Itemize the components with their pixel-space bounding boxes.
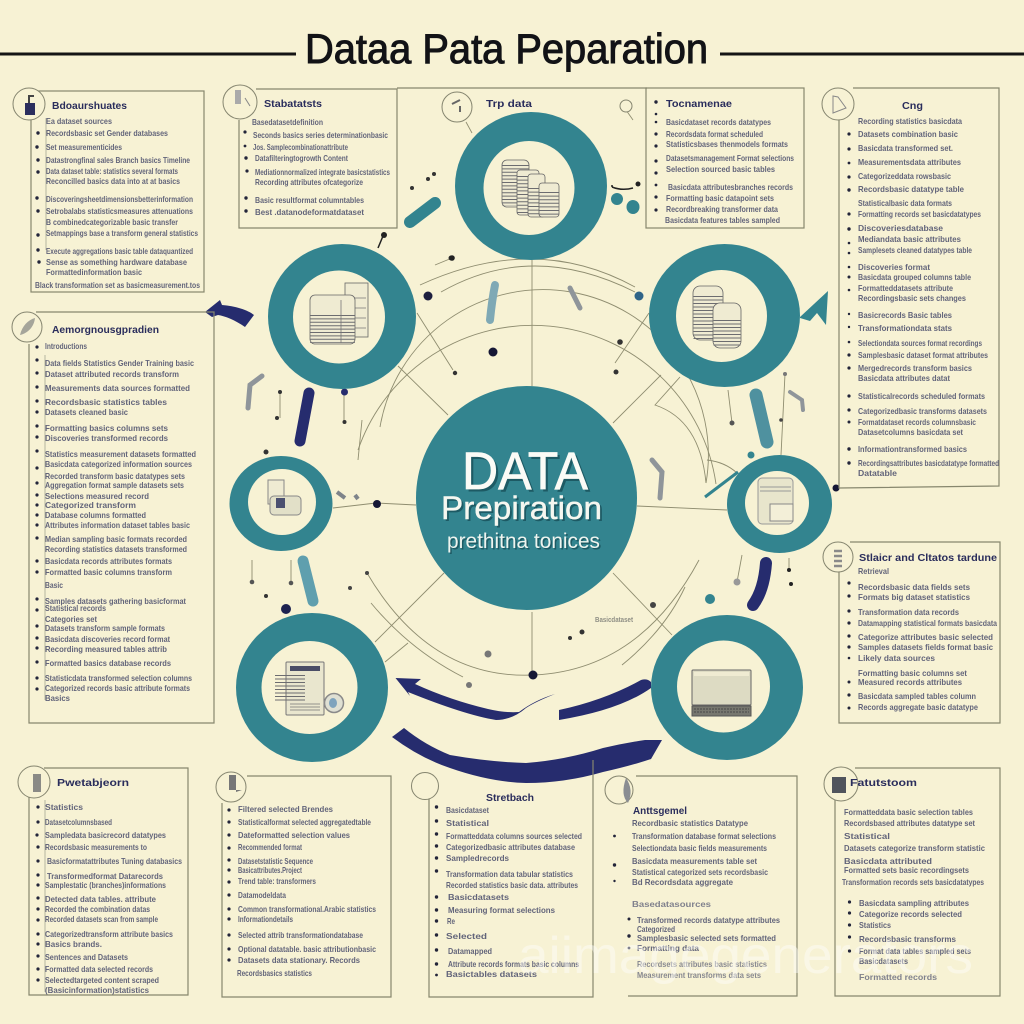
list: bottom third panel: Transformation data tabular statistics [446, 869, 573, 879]
list: left tall panel: Statistics measurement datasets formatted [45, 449, 196, 459]
list: left tall panel: Samples datasets gathering basicformat [45, 596, 186, 606]
arrows [205, 291, 828, 783]
list: bottom second panel: Selected attrib transformationdatabase [238, 930, 363, 940]
list: right tall panel: Basicdata attributes datat [858, 373, 950, 383]
list: bottom second panel: Dateformatted selection values [238, 830, 350, 840]
list: bottom fourth panel: Transformed records datatype attributes [637, 915, 780, 925]
list: left tall panel: Median sampling basic formats recorded [45, 534, 187, 544]
list: left tall panel: Datasets transform sample formats [45, 623, 165, 633]
node: lower left [236, 613, 388, 762]
list: right tall panel: Formatting records set basicdatatypes [858, 209, 981, 219]
list: left tall panel: Statistical records [45, 603, 106, 613]
list: second panel: Jos. Samplecombinationattribute [253, 142, 348, 152]
list: bottom third panel [435, 805, 582, 979]
list: left tall panel: Recording measured tables attrib [45, 644, 167, 654]
list: bottom third panel: Selected [446, 931, 487, 941]
list: right tall panel: Categorizeddata rowsbasic [858, 171, 951, 181]
icon: document [268, 480, 301, 515]
list: second panel: Best .datanodeformatdataset [255, 207, 364, 217]
icon: bottom fourth panel [605, 776, 633, 804]
center circle: prethitna tonices [448, 532, 602, 554]
title [0, 25, 1024, 72]
list: bottom fifth panel: Statistical [844, 831, 890, 841]
icon: top center circle left [442, 92, 472, 122]
list: bottom second panel: Common transformational.Arabic statistics [238, 904, 376, 914]
list: bottom fifth panel: Recordsbasic transforms [859, 934, 956, 944]
list: bottom second panel: Filtered selected Brendes [238, 804, 333, 814]
heading: bottom fourth panel: Anttsgemel [633, 805, 687, 817]
list: top left panel: Set measurementicides [46, 142, 122, 152]
heading: left tall panel: Aemorgnousgpradien [52, 324, 159, 336]
list: bottom fourth panel: Recordsets attributes basic statistics [637, 959, 767, 969]
list: bottom first panel: Datasetcolumnsbased [45, 817, 112, 827]
list: right tall panel: Samplesbasic dataset format attributes [858, 350, 988, 360]
list: top fourth panel [654, 100, 794, 225]
icon: bottom second panel [216, 772, 246, 802]
list: bottom second panel: Basicattributes.Project [238, 865, 302, 875]
list: right lower panel [847, 566, 997, 712]
panel: left tall [12, 312, 214, 723]
list: right lower panel: Recordsbasic data fields sets [858, 582, 970, 592]
list: bottom first panel: Sampledata basicrecord datatypes [45, 830, 166, 840]
list: bottom third panel: Basicdatasets [448, 892, 509, 902]
list: bottom second panel: Trend table: transformers [238, 876, 316, 886]
list: left tall panel: Categorized transform [45, 500, 136, 510]
list: right tall panel: Datasetcolumns basicdata set [858, 427, 963, 437]
list: left tall panel: Selections measured record [45, 491, 149, 501]
node: upper left server [268, 244, 416, 389]
list: right tall panel: Mergedrecords transform basics [858, 363, 972, 373]
heading: top center: Trp data [486, 98, 532, 110]
icon: bottom first panel [18, 766, 50, 798]
panel: bottom fifth [824, 767, 1000, 996]
list: left tall panel: Categorized records basic attribute formats [45, 683, 190, 693]
list: bottom fifth panel: Transformation records sets basicdatatypes [842, 877, 984, 887]
panel: bottom fourth [605, 776, 797, 996]
list: bottom first panel: Selectedtargeted content scraped [45, 975, 159, 985]
list: left tall panel: Basic [45, 580, 63, 590]
list: bottom first panel: (Basicinformation)statistics [45, 985, 149, 995]
list: bottom third panel: Recorded statistics basic data. attributes [446, 880, 578, 890]
list: top fourth panel: Basicdata features tables sampled [665, 215, 780, 225]
list: top left panel: Data dataset table: statistics several formats [46, 166, 178, 176]
list: bottom second panel: Recordsbasics statistics [237, 968, 312, 978]
list: bottom third panel: Formatteddata columns sources selected [446, 831, 582, 841]
list: right tall panel: Selectiondata sources format recordings [858, 338, 982, 348]
list: bottom fourth panel: Formatting data [637, 943, 699, 953]
list: right tall panel: Statisticalbasic data formats [858, 198, 952, 208]
list: second panel: Basic resultformat columntables [255, 195, 364, 205]
list: bottom fifth panel: Format data tables sampled sets [859, 946, 971, 956]
list: bottom first panel: Recorded datasets scan from sample [45, 914, 158, 924]
list: left tall panel: Data fields Statistics Gender Training basic [45, 358, 194, 368]
watermark: aiimagegenerators [518, 927, 973, 985]
list: top left panel: B combinedcategorizable basic transfer [46, 217, 179, 227]
list: right lower panel: Measured records attributes [858, 677, 962, 687]
list: second panel: Recording attributes ofcategorize [255, 177, 363, 187]
list: bottom third panel: Categorizedbasic attributes database [446, 842, 575, 852]
heading: bottom fifth panel: Fatutstoom [850, 777, 917, 789]
list: top fourth panel: Formatting basic datapoint sets [666, 193, 774, 203]
list: bottom third panel: Basicdataset [446, 805, 489, 815]
list: left tall panel: Basics [45, 693, 70, 703]
list: bottom fourth panel: Transformation database format selections [632, 831, 776, 841]
list: left tall panel: Formatted basics database records [45, 658, 171, 668]
list: bottom first panel [35, 800, 182, 995]
list: top fourth panel: Selection sourced basic tables [666, 164, 775, 174]
list: right tall panel: Formatteddatasets attribute [858, 283, 953, 293]
center circle: DATA [464, 444, 591, 504]
list: left tall panel: Basicdata discoveries record format [45, 634, 170, 644]
list: second panel: Mediationnormalized integrate basicstatistics [255, 167, 390, 177]
panel: bottom first [18, 766, 188, 995]
list: left tall panel: Recorded transform basic datatypes sets [45, 471, 185, 481]
list: left tall panel: Dataset attributed records transform [45, 369, 179, 379]
list: bottom second panel: Datasetstatistic Sequence [238, 856, 313, 866]
center circle: DATA [462, 442, 589, 501]
list: second panel [243, 117, 390, 217]
list: left tall panel: Datasets cleaned basic [45, 407, 128, 417]
heading: bottom first panel: Pwetabjeorn [57, 777, 129, 789]
list: right tall panel [847, 116, 999, 478]
list: right lower panel: Records aggregate basic datatype [858, 702, 978, 712]
list: bottom fourth panel: Bd Recordsdata aggregate [632, 877, 733, 887]
list: bottom fourth panel: Samplesbasic selected sets formatted [637, 933, 776, 943]
list: left tall panel: Database columns formatted [45, 510, 146, 520]
list: top left panel: Formattedinformation basic [46, 267, 142, 277]
list: top left panel: Setmappings base a transform general statistics [46, 228, 198, 238]
center circle [416, 386, 637, 610]
panel: bottom second [216, 772, 391, 997]
list: bottom fifth panel: Basicdatasets [859, 956, 908, 966]
list: bottom fourth panel: Basedatasources [632, 899, 711, 909]
node: middle right [727, 455, 832, 553]
list: right lower panel: Retrieval [858, 566, 889, 576]
node: top database [455, 112, 607, 260]
list: bottom fifth panel: Statistics [859, 920, 891, 930]
list: bottom fourth panel: Measurement transforms data sets [637, 970, 761, 980]
list: right tall panel: Discoveriesdatabase [858, 223, 943, 233]
list: right lower panel: Likely data sources [858, 653, 935, 663]
heading: right lower panel: Stlaicr and Cltatos tardune [859, 552, 997, 564]
list: bottom third panel: Basictables datasets [446, 969, 537, 979]
icon: right tall panel [822, 88, 854, 120]
list: bottom first panel: Basics brands. [45, 939, 102, 949]
list: left tall panel: Categories set [45, 614, 97, 624]
node: upper right stack [649, 244, 800, 387]
list: bottom first panel: Formatted data selected records [45, 964, 153, 974]
list: left tall panel: Statisticdata transformed selection columns [45, 673, 192, 683]
list: second panel: Datafilteringtogrowth Content [255, 153, 348, 163]
list: bottom second panel: Recommended format [238, 842, 302, 852]
panel: bottom third [412, 760, 593, 997]
icon: right lower panel [823, 542, 853, 572]
list: bottom third panel: Measuring format selections [448, 905, 555, 915]
list: right lower panel: Samples datasets fields format basic [858, 642, 993, 652]
heading: right tall panel: Cng [902, 100, 923, 112]
list: bottom fourth panel: Selectiondata basic fields measurements [632, 843, 767, 853]
list: right tall panel: Recordingsbasic sets changes [858, 293, 966, 303]
list: bottom first panel: Detected data tables. attribute [45, 894, 156, 904]
heading: top fourth panel: Tocnamenae [666, 98, 732, 110]
list: right tall panel: Recording statistics basicdata [858, 116, 962, 126]
title: Dataa Pata Peparation [305, 25, 708, 72]
list: bottom fourth panel: Categorized [637, 924, 675, 934]
list: right lower panel: Datamapping statistical formats basicdata [858, 618, 997, 628]
list: top left panel: Setrobalabs statisticsmeasures attenuations [46, 206, 193, 216]
panel: top center [397, 88, 647, 122]
list: bottom fourth panel: Basicdata measurements table set [632, 856, 757, 866]
node: middle left [230, 456, 332, 551]
list: bottom fourth panel [613, 818, 780, 980]
list: left tall panel: Aggregation format sample datasets sets [45, 480, 184, 490]
list: top fourth panel: Recordsdata format scheduled [666, 129, 763, 139]
list: top fourth panel: Statisticsbases thenmodels formats [666, 139, 788, 149]
list: left tall panel: Recordsbasic statistics tables [45, 397, 167, 407]
panel: right tall [822, 88, 999, 488]
list: bottom second panel: Optional datatable. basic attributionbasic [238, 944, 376, 954]
list: right tall panel: Datasets combination basic [858, 129, 958, 139]
node: lower right [651, 615, 803, 760]
icon: bottom fifth panel [824, 767, 858, 801]
list: left tall panel: Recording statistics datasets transformed [45, 544, 187, 554]
list: bottom fifth panel: Formatted records [859, 972, 937, 982]
list: bottom first panel: Transformedformat Datarecords [47, 871, 163, 881]
icon: top left panel [13, 88, 45, 120]
heading: bottom third panel: Stretbach [486, 792, 534, 804]
icon: left tall panel [12, 312, 42, 342]
list: right tall panel: Basicdata transformed set. [858, 143, 953, 153]
icon: spreadsheet document [286, 662, 344, 715]
list: right tall panel: Formatdataset records columnsbasic [858, 417, 976, 427]
list: right tall panel: Measurementsdata attributes [858, 157, 961, 167]
list: right tall panel: Statisticalrecords scheduled formats [858, 391, 985, 401]
list: top left panel: Discoveringsheetdimensionsbetterinformation [46, 194, 193, 204]
icon: bottom third panel [412, 772, 438, 800]
list: top fourth panel: Recordbreaking transformer data [666, 204, 778, 214]
list: bottom first panel: Categorizedtransform attribute basics [45, 929, 173, 939]
list: right tall panel: Recordsbasic datatype table [858, 184, 964, 194]
list: top fourth panel: Basicdataset records datatypes [666, 117, 771, 127]
list: left tall panel [35, 341, 196, 703]
list: left tall panel: Formatted basic columns transform [45, 567, 172, 577]
list: bottom second panel: Informationdetails [238, 914, 293, 924]
icon: coin stack database [693, 286, 741, 348]
list: bottom first panel: Statistics [45, 802, 83, 812]
list: bottom second panel: Datasets data stationary. Records [238, 955, 360, 965]
list: bottom second panel: Datamodeldata [238, 890, 286, 900]
list: top left panel: Reconcilled basics data into at at basics [46, 176, 180, 186]
list: top left panel: Recordsbasic set Gender databases [46, 128, 168, 138]
list: top left panel: Sense as something hardware database [46, 257, 187, 267]
list: bottom third panel: Statistical [446, 818, 489, 828]
list: bottom fifth panel: Recordsbased attributes datatype set [844, 818, 975, 828]
panel: top second [223, 85, 397, 228]
list: second panel: Basedatasetdefinition [252, 117, 323, 127]
panel: top left [13, 88, 204, 292]
list: right lower panel: Formatting basic columns set [858, 668, 967, 678]
list: bottom fourth panel: Statistical categorized sets recordsbasic [632, 867, 768, 877]
list: bottom first panel: Recorded the combination datas [45, 904, 150, 914]
list: top left panel: Ea dataset sources [46, 116, 112, 126]
list: right tall panel: Informationtransformed basics [858, 444, 967, 454]
list: bottom third panel: Sampledrecords [446, 853, 509, 863]
icon: folder [758, 478, 793, 524]
list: bottom third panel: Re [447, 916, 455, 926]
list: top fourth panel: Datasetsmanagement Format selections [666, 153, 794, 163]
list: right lower panel: Transformation data records [858, 607, 959, 617]
list: bottom fifth panel: Formatteddata basic selection tables [844, 807, 973, 817]
center circle: Prepiration [441, 490, 602, 526]
center circle: Prepiration [443, 492, 604, 528]
panel: right lower [823, 542, 1000, 723]
list: bottom second panel: Statisticalformat selected aggregatedtable [238, 817, 371, 827]
icon: laptop [692, 670, 751, 716]
list: bottom first panel: Samplestatic (branches)informations [45, 880, 166, 890]
list: top left panel: Black transformation set as basicmeasurement.tos [35, 280, 200, 290]
list: right tall panel: Samplesets cleaned datatypes table [858, 245, 972, 255]
list: top left panel [35, 116, 200, 290]
list: bottom second panel [227, 804, 376, 978]
icon: database table [310, 283, 368, 344]
list: left tall panel: Introductions [45, 341, 87, 351]
list: right tall panel: Mediandata basic attributes [858, 234, 961, 244]
list: right lower panel: Categorize attributes basic selected [858, 632, 993, 642]
list: top left panel: Datastrongfinal sales Branch basics Timeline [46, 155, 190, 165]
list: right tall panel: Discoveries format [858, 262, 930, 272]
list: left tall panel: Measurements data sources formatted [45, 383, 190, 393]
list: bottom first panel: Recordsbasic measurements to [45, 842, 147, 852]
network lines [252, 110, 789, 677]
list: bottom third panel: Datamapped [448, 946, 492, 956]
list: bottom fifth panel: Basicdata attributed [844, 856, 932, 866]
list: right lower panel: Basicdata sampled tables column [858, 691, 976, 701]
list: bottom third panel: Attribute records formats basic columns [448, 959, 579, 969]
network dots and capsules [248, 172, 840, 688]
list: top fourth panel: Basicdata attributesbranches records [668, 182, 793, 192]
icon: top center circle right [620, 100, 632, 112]
list: bottom fifth panel: Basicdata sampling attributes [859, 898, 969, 908]
list: bottom fifth panel: Datasets categorize transform statistic [844, 843, 985, 853]
list: right tall panel: Basicrecords Basic tables [858, 310, 952, 320]
list: left tall panel: Attributes information dataset tables basic [45, 520, 190, 530]
list: bottom fifth panel: Categorize records selected [859, 909, 962, 919]
heading: top left panel: Bdoaurshuates [52, 100, 127, 112]
network dots and capsules: Basicdataset [595, 615, 633, 624]
list: right lower panel: Formats big dataset statistics [858, 592, 970, 602]
icon: second panel [223, 85, 257, 119]
panel: top fourth [646, 88, 804, 228]
list: top left panel: Execute aggregations basic table dataquantized [46, 246, 193, 256]
list: bottom fifth panel [842, 807, 985, 982]
list: right tall panel: Datatable [858, 468, 897, 478]
icon: stacked cylinders [502, 160, 559, 217]
list: right tall panel: Categorizedbasic transforms datasets [858, 406, 987, 416]
list: second panel: Seconds basics series determinationbasic [253, 130, 388, 140]
list: right tall panel: Transformationdata stats [858, 323, 952, 333]
list: left tall panel: Basicdata records attributes formats [45, 556, 172, 566]
list: bottom fifth panel: Formatted sets basic recordingsets [844, 865, 969, 875]
list: bottom first panel: Basicformatattributes Tuning databasics [47, 856, 182, 866]
heading: second panel: Stabatatsts [264, 98, 322, 110]
list: bottom fourth panel: Recordbasic statistics Datatype [632, 818, 748, 828]
list: left tall panel: Basicdata categorized information sources [45, 459, 192, 469]
center circle: prethitna tonices [447, 530, 600, 553]
list: bottom first panel: Sentences and Datasets [45, 952, 128, 962]
list: right tall panel: Basicdata grouped columns table [858, 272, 971, 282]
list: left tall panel: Discoveries transformed records [45, 433, 168, 443]
list: left tall panel: Formatting basics columns sets [45, 423, 168, 433]
